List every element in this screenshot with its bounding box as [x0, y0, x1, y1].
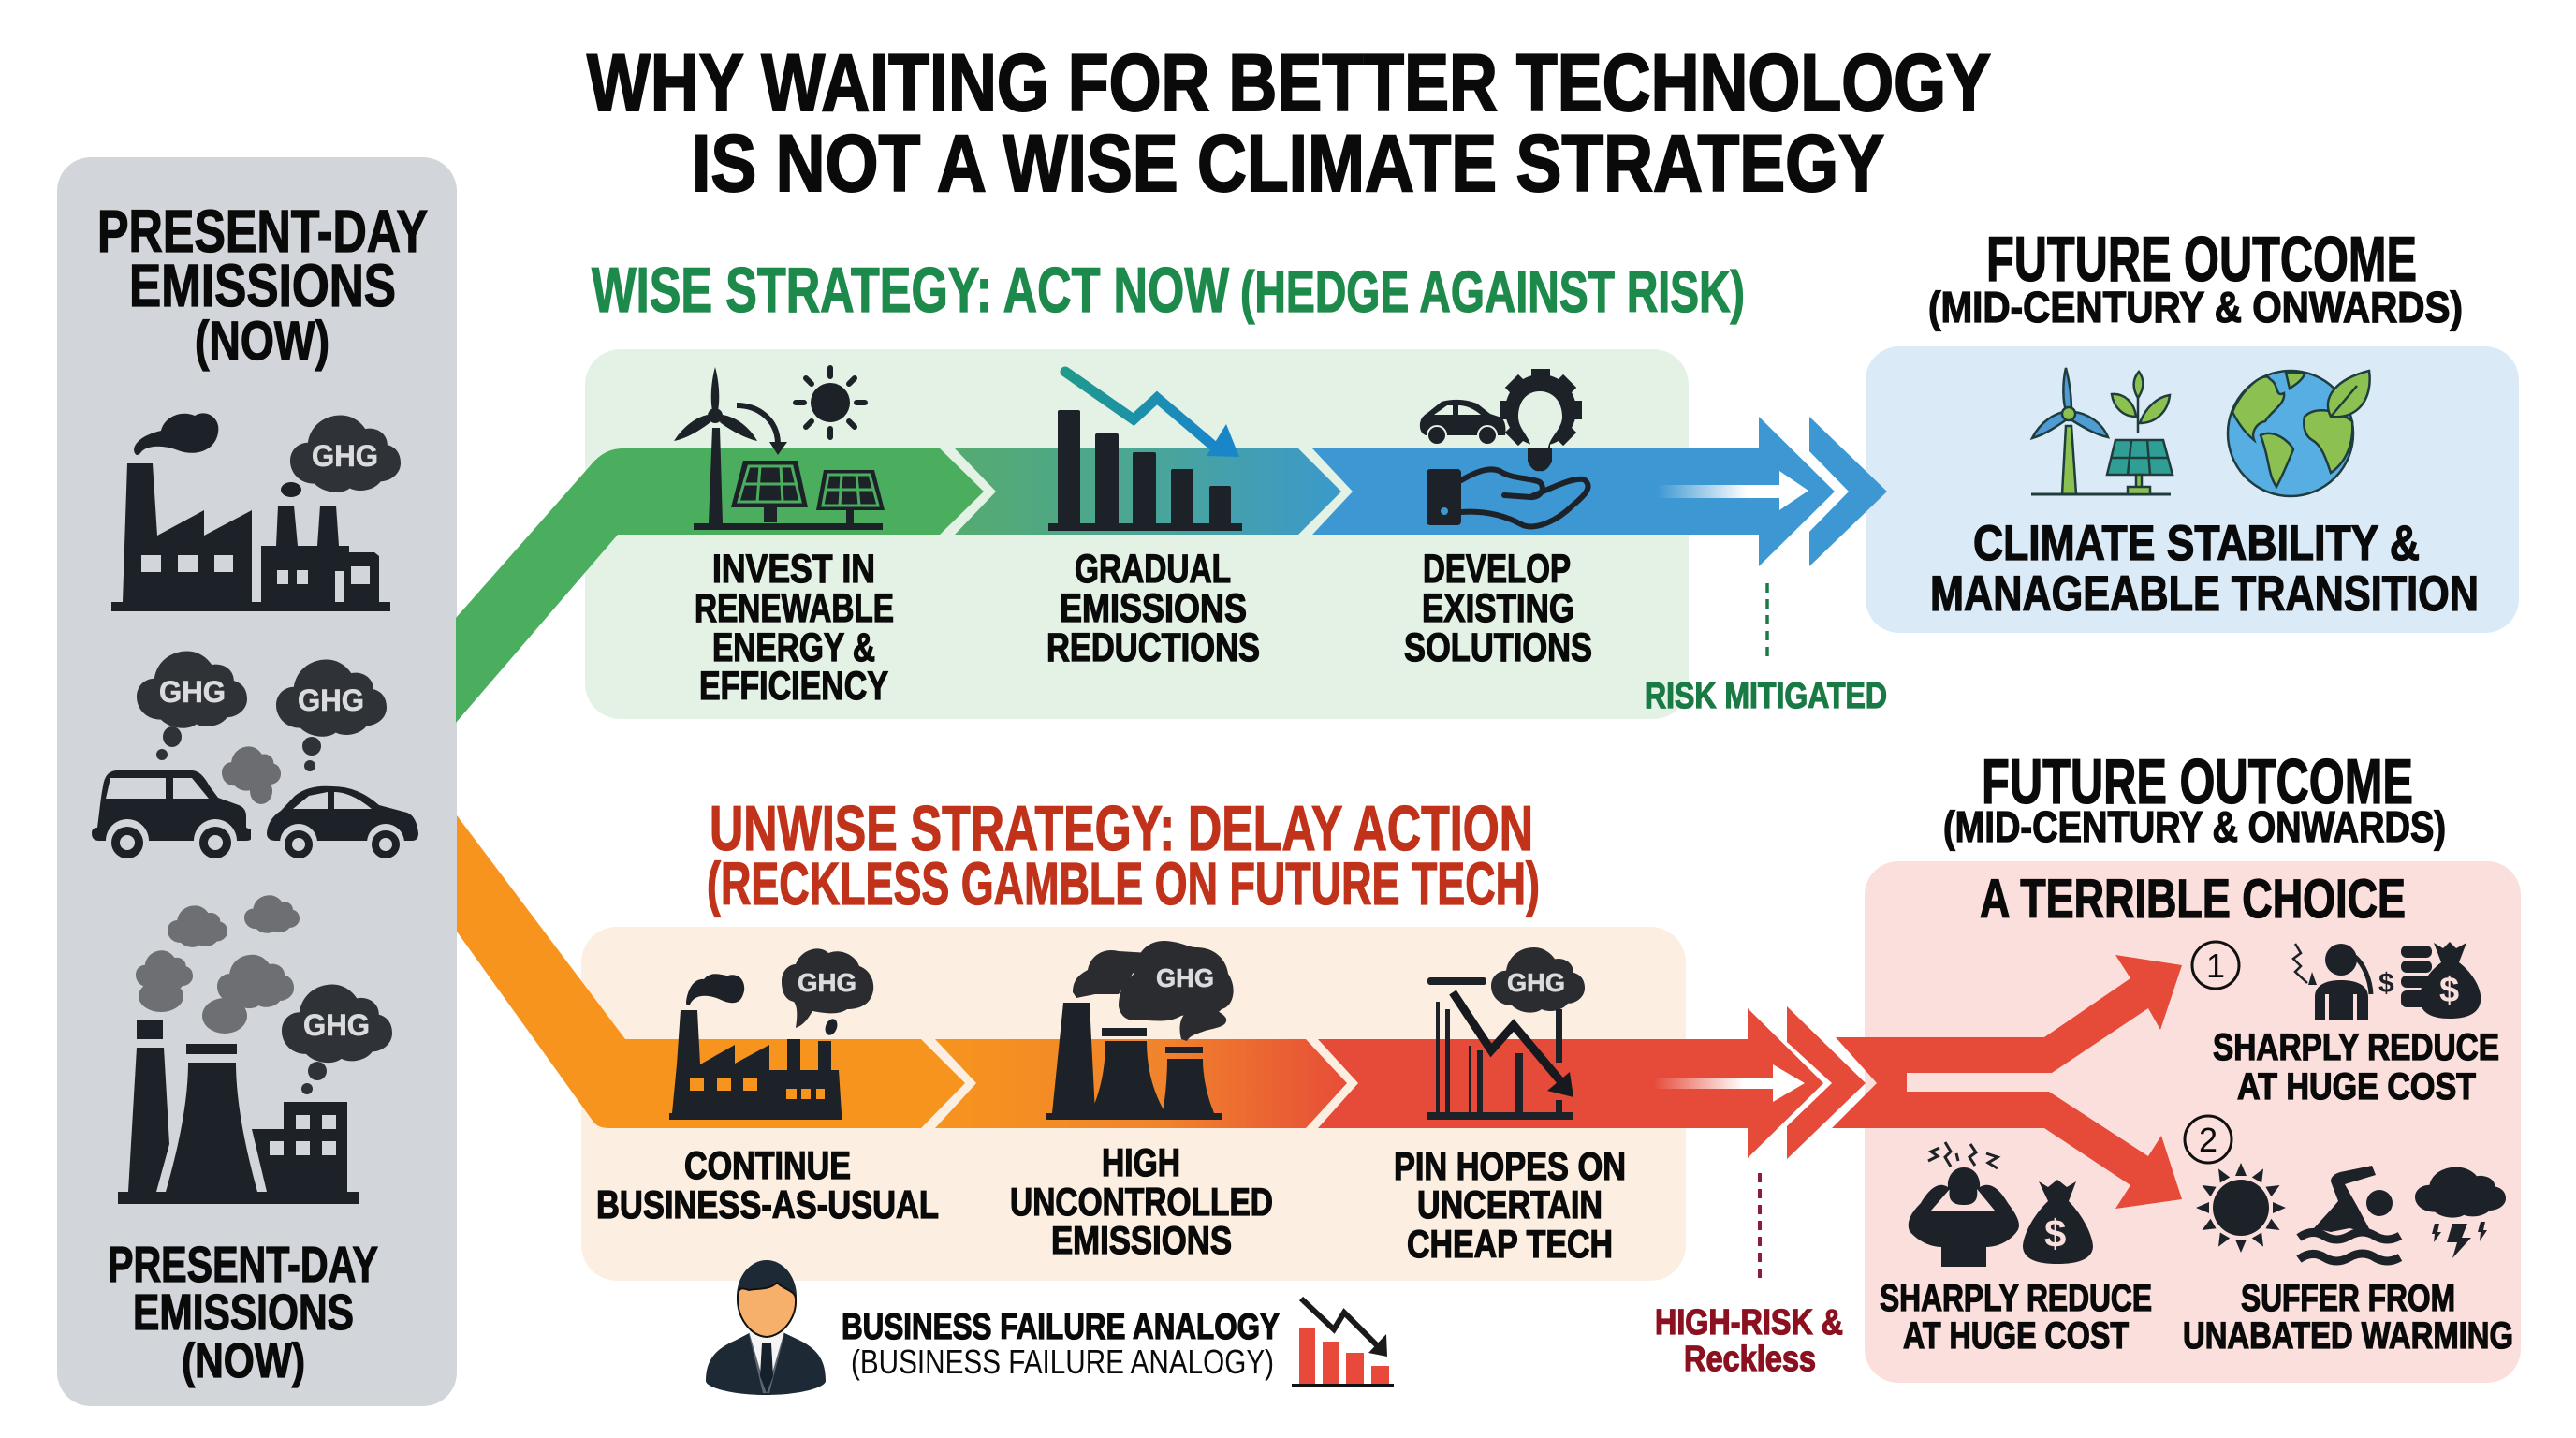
icon: cars with GHG clouds: GHG [298, 683, 364, 717]
callout: high risk and reckless [1655, 1173, 1843, 1379]
text: option 1 repeat sharply reduce: SHARPLY REDUCE [1880, 1278, 2152, 1319]
icon: business decline chart [1292, 1299, 1394, 1387]
icon: factories with GHG cloud [111, 413, 401, 611]
badge: option 2 [2185, 1116, 2232, 1163]
icon: car, gear bulb and hand [1420, 369, 1588, 526]
icon: cars with GHG clouds: GHG [159, 675, 226, 709]
icon: turbine, plant and solar panel [2031, 368, 2173, 494]
text: continue business as usual: CONTINUE [684, 1143, 851, 1187]
callout: high risk and reckless: HIGH-RISK & [1655, 1303, 1843, 1343]
icon: falling chart with GHG cloud [1427, 947, 1585, 1120]
text: option 2 suffer from unabated warming: SUFFER FROM [2241, 1278, 2455, 1319]
heading: wise strategy: WISE STRATEGY: ACT NOW [592, 255, 1230, 326]
icon: power plant high emissions: GHG [1156, 963, 1214, 992]
text: option 1 sharply reduce: AT HUGE COST [2237, 1066, 2476, 1108]
icon: businessman [706, 1260, 826, 1395]
text: develop existing solutions: EXISTING [1422, 586, 1574, 631]
badge: option 2: 2 [2199, 1121, 2217, 1159]
arrow: split into two outcomes [1832, 955, 2182, 1209]
heading: future outcome bottom [1943, 746, 2446, 851]
text: business failure analogy: (BUSINESS FAILURE ANALOGY) [851, 1343, 1274, 1381]
heading: unwise strategy: (RECKLESS GAMBLE ON FUTURE TECH) [707, 850, 1540, 917]
text: pin hopes on uncertain cheap tech: UNCERTAIN [1417, 1182, 1603, 1226]
heading: present-day emissions top: EMISSIONS [129, 252, 396, 319]
heading: future outcome top: FUTURE OUTCOME [1986, 224, 2417, 295]
icon: person and money: $ [2439, 971, 2459, 1010]
text: invest in renewable energy [695, 547, 894, 709]
title [587, 38, 1991, 209]
arrow: wise strategy band [456, 417, 1887, 723]
text: invest in renewable energy: INVEST IN [712, 547, 875, 592]
text: gradual emissions reductions: REDUCTIONS [1046, 625, 1260, 670]
text: develop existing solutions [1404, 547, 1592, 670]
text: develop existing solutions: DEVELOP [1423, 547, 1571, 592]
icon: sun, swimmer and storm [2196, 1163, 2506, 1261]
heading: present-day emissions top: PRESENT-DAY [97, 198, 428, 265]
icon: falling chart with GHG cloud: GHG [1507, 968, 1565, 997]
callout: high risk and reckless: Reckless [1684, 1340, 1816, 1379]
heading: unwise strategy [707, 793, 1540, 917]
text: gradual emissions reductions: GRADUAL [1075, 547, 1231, 592]
panel: wise strategy background [585, 349, 1689, 719]
text: business failure analogy: BUSINESS FAILURE ANALOGY [842, 1307, 1280, 1347]
text: continue business as usual [596, 1143, 939, 1226]
text: option 1 repeat sharply reduce [1880, 1278, 2152, 1357]
text: continue business as usual: BUSINESS-AS-USUAL [596, 1182, 939, 1226]
text: high uncontrolled emissions: EMISSIONS [1051, 1218, 1232, 1262]
text: climate stability: CLIMATE STABILITY & [1973, 516, 2420, 571]
icon: factories with GHG cloud: GHG [312, 439, 378, 473]
heading: a terrible choice: A TERRIBLE CHOICE [1980, 869, 2406, 930]
title: IS NOT A WISE CLIMATE STRATEGY [692, 119, 1884, 209]
text: high uncontrolled emissions: UNCONTROLLED [1010, 1180, 1273, 1224]
text: option 2 suffer from unabated warming: UNABATED WARMING [2183, 1315, 2513, 1357]
icon: factory business as usual [669, 948, 873, 1120]
badge: option 1: 1 [2206, 946, 2225, 985]
icon: declining bars with trend arrow [1048, 372, 1242, 531]
text: option 1 repeat sharply reduce: AT HUGE COST [1903, 1315, 2129, 1357]
text: pin hopes on uncertain cheap tech: CHEAP TECH [1407, 1222, 1613, 1266]
callout: risk mitigated: RISK MITIGATED [1645, 676, 1887, 716]
icon: person and money: $ [2378, 968, 2394, 999]
text: invest in renewable energy: ENERGY & [712, 625, 875, 670]
icon: person and money [2293, 942, 2481, 1020]
heading: present-day emissions bottom [108, 1237, 378, 1388]
text: invest in renewable energy: RENEWABLE [695, 586, 894, 631]
text: business failure analogy [842, 1307, 1280, 1381]
heading: unwise strategy: UNWISE STRATEGY: DELAY ACTION [710, 793, 1533, 864]
icon: globe with leaf [2228, 371, 2370, 496]
heading: present-day emissions top [97, 198, 428, 372]
text: option 2 suffer from unabated warming [2183, 1278, 2513, 1357]
icon: stressed person with money bag: $ [2044, 1211, 2066, 1255]
text: invest in renewable energy: EFFICIENCY [699, 664, 888, 709]
icon: factory business as usual: GHG [798, 968, 856, 997]
text: option 1 sharply reduce: SHARPLY REDUCE [2213, 1027, 2499, 1068]
heading: future outcome top: (MID-CENTURY & ONWARDS) [1928, 283, 2463, 331]
icon: power plant high emissions [1046, 941, 1234, 1120]
text: gradual emissions reductions: EMISSIONS [1060, 586, 1247, 631]
heading: present-day emissions bottom: PRESENT-DAY [108, 1237, 378, 1293]
panel: present-day emissions [57, 157, 457, 1406]
text: pin hopes on uncertain cheap tech: PIN HOPES ON [1394, 1144, 1626, 1188]
heading: present-day emissions bottom: EMISSIONS [133, 1284, 354, 1341]
heading: wise strategy: (HEDGE AGAINST RISK) [1240, 260, 1745, 325]
heading: future outcome bottom: (MID-CENTURY & ONWARDS) [1943, 802, 2446, 851]
panel: terrible choice outcome [1865, 861, 2521, 1383]
text: pin hopes on uncertain cheap tech [1394, 1144, 1626, 1266]
arrow: unwise strategy band [457, 815, 1866, 1159]
icon: stressed person with money bag [1909, 1142, 2093, 1267]
text: climate stability [1930, 516, 2479, 622]
icon: power plant with smoke [118, 895, 392, 1204]
text: gradual emissions reductions [1046, 547, 1260, 670]
icon: wind turbine and solar panels [674, 367, 885, 530]
panel: unwise strategy background [581, 927, 1686, 1281]
panel: climate stability outcome [1866, 346, 2519, 633]
text: high uncontrolled emissions [1010, 1140, 1273, 1262]
icon: power plant with smoke: GHG [303, 1008, 370, 1042]
text: develop existing solutions: SOLUTIONS [1404, 625, 1592, 670]
heading: future outcome bottom: FUTURE OUTCOME [1982, 746, 2413, 817]
icon: cars with GHG clouds [92, 651, 418, 862]
title: WHY WAITING FOR BETTER TECHNOLOGY [587, 38, 1991, 128]
text: option 1 sharply reduce [2213, 1027, 2499, 1108]
heading: present-day emissions bottom: (NOW) [182, 1334, 305, 1388]
heading: present-day emissions top: (NOW) [195, 311, 329, 372]
badge: option 1 [2192, 942, 2239, 989]
heading: future outcome top [1928, 224, 2463, 331]
text: high uncontrolled emissions: HIGH [1102, 1140, 1180, 1184]
